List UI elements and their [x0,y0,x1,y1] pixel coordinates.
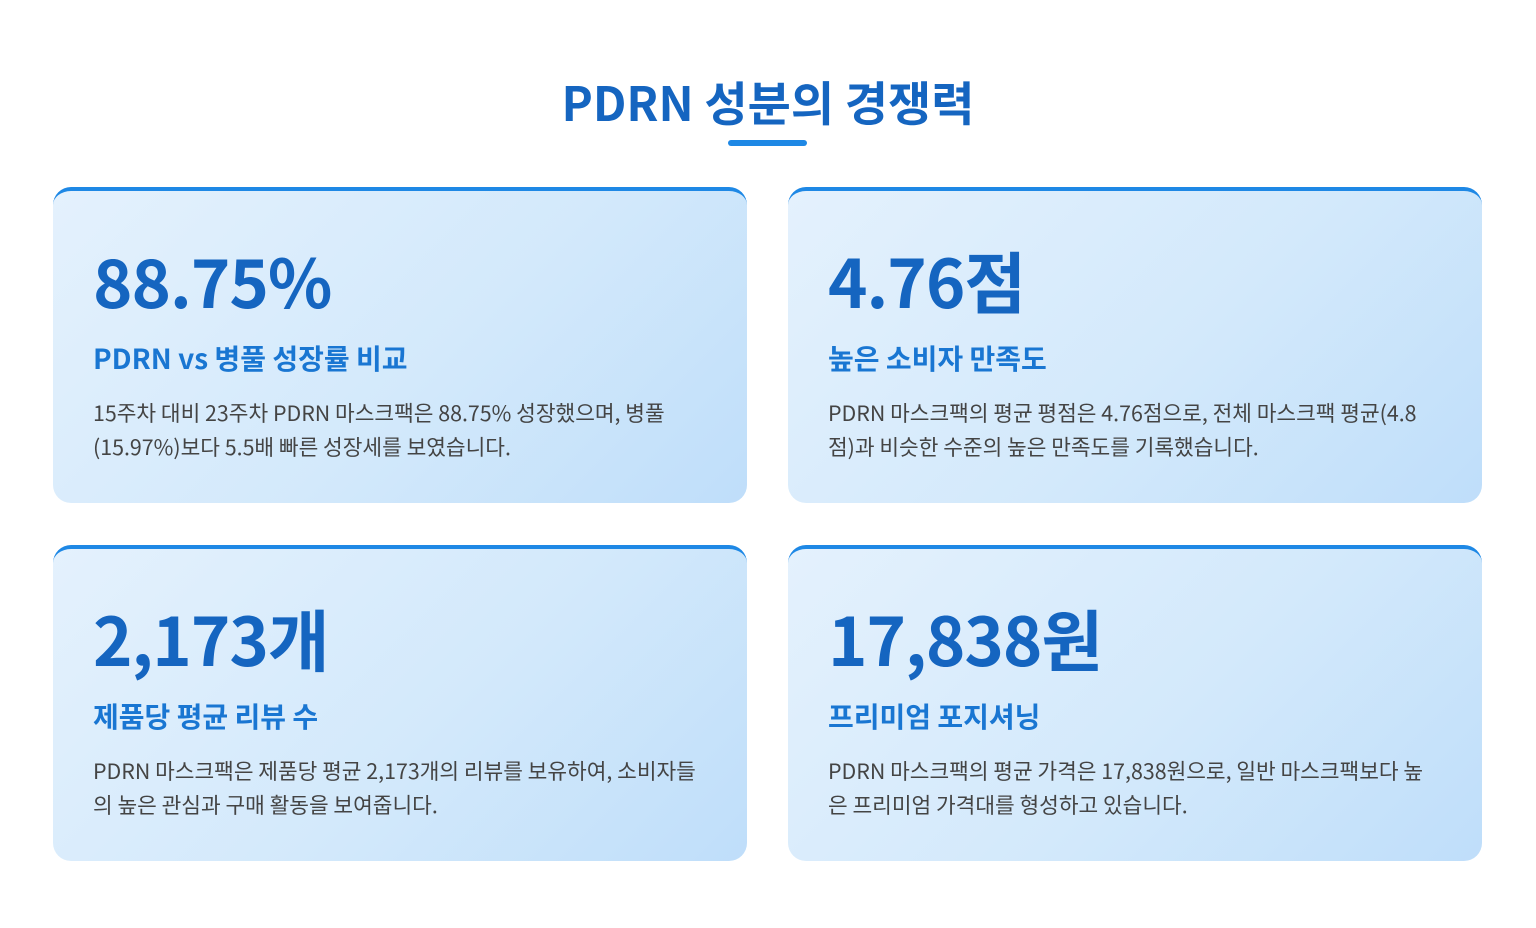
stat number: 88.75% [93,231,331,328]
card: growth [53,187,747,503]
card: price [788,545,1482,861]
description: PDRN 마스크팩의 평균 평점은 4.76점으로, 전체 마스크팩 평균(4.8 [828,397,1417,428]
stat number: 17,838원 [828,589,1102,686]
description: 15주차 대비 23주차 PDRN 마스크팩은 88.75% 성장했으며, 병풀 [93,397,665,428]
description: PDRN 마스크팩은 제품당 평균 2,173개의 리뷰를 보유하여, 소비자들 [93,755,696,786]
description: 의 높은 관심과 구매 활동을 보여줍니다. [93,789,438,820]
subtitle: 높은 소비자 만족도 [828,338,1047,378]
description [93,755,696,820]
subtitle: 제품당 평균 리뷰 수 [93,696,318,736]
description [93,397,665,462]
description [828,397,1417,462]
description [828,755,1423,820]
stat number: 2,173개 [93,589,329,686]
description: 점)과 비슷한 수준의 높은 만족도를 기록했습니다. [828,431,1259,462]
description: PDRN 마스크팩의 평균 가격은 17,838원으로, 일반 마스크팩보다 높 [828,755,1423,786]
description: (15.97%)보다 5.5배 빠른 성장세를 보였습니다. [93,431,511,462]
stat number: 4.76점 [828,231,1025,328]
card: satisfaction [788,187,1482,503]
title: PDRN 성분의 경쟁력 [562,66,974,135]
description: 은 프리미엄 가격대를 형성하고 있습니다. [828,789,1188,820]
subtitle: PDRN vs 병풀 성장률 비교 [93,338,407,378]
card: reviews [53,545,747,861]
subtitle: 프리미엄 포지셔닝 [828,696,1040,736]
